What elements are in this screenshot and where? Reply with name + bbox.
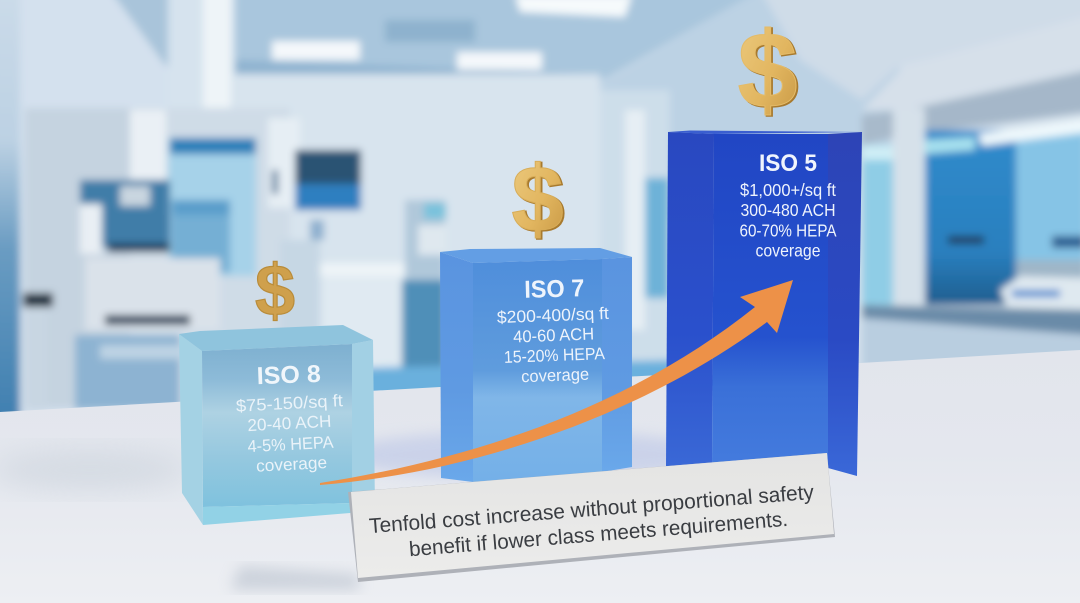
heading: ISO 8: ISO 8: [256, 361, 321, 390]
icon: gold dollar sign large: $: [737, 9, 798, 130]
text: ISO 5 details: 300-480 ACH: [740, 200, 836, 220]
text: ISO 8 details: coverage: [256, 453, 327, 476]
callout: caption plaque: [348, 453, 835, 582]
text: ISO 8 details: [235, 391, 347, 477]
text: ISO 5 details: coverage: [756, 240, 820, 260]
icon: gold dollar sign small: $: [255, 251, 295, 331]
text: ISO 7 details: 15-20% HEPA: [504, 344, 606, 367]
text: ISO 7 details: coverage: [521, 365, 590, 386]
text: ISO 7 details: 40-60 ACH: [513, 324, 594, 347]
text: ISO 8 details: $75-150/sq ft: [235, 391, 344, 416]
text: ISO 5 details: [740, 180, 837, 260]
icon: gold dollar sign medium: $: [511, 146, 564, 251]
text: ISO 7 details: $200-400/sq ft: [497, 304, 609, 327]
block: ISO 8: [179, 325, 375, 525]
text: caption: benefit if lower class meets requirements.: [408, 508, 789, 561]
heading: ISO 7: ISO 7: [524, 275, 585, 304]
white table surface: [0, 350, 1080, 603]
block: ISO 5: [666, 130, 862, 476]
text: ISO 8 details: 20-40 ACH: [247, 412, 332, 435]
text: ISO 5 details: 60-70% HEPA: [740, 220, 837, 240]
arrow: rising cost curve: [320, 280, 793, 485]
block: ISO 7: [440, 248, 632, 482]
text: ISO 8 details: 4-5% HEPA: [247, 433, 335, 456]
text: ISO 5 details: $1,000+/sq ft: [740, 180, 836, 200]
icon: gold dollar sign medium: $: [513, 147, 565, 252]
heading: ISO 5: ISO 5: [759, 150, 817, 177]
icon: gold dollar sign large: $: [739, 10, 799, 131]
text: ISO 7 details: [497, 304, 612, 387]
text: caption: Tenfold cost increase without proportional safety: [368, 481, 815, 538]
